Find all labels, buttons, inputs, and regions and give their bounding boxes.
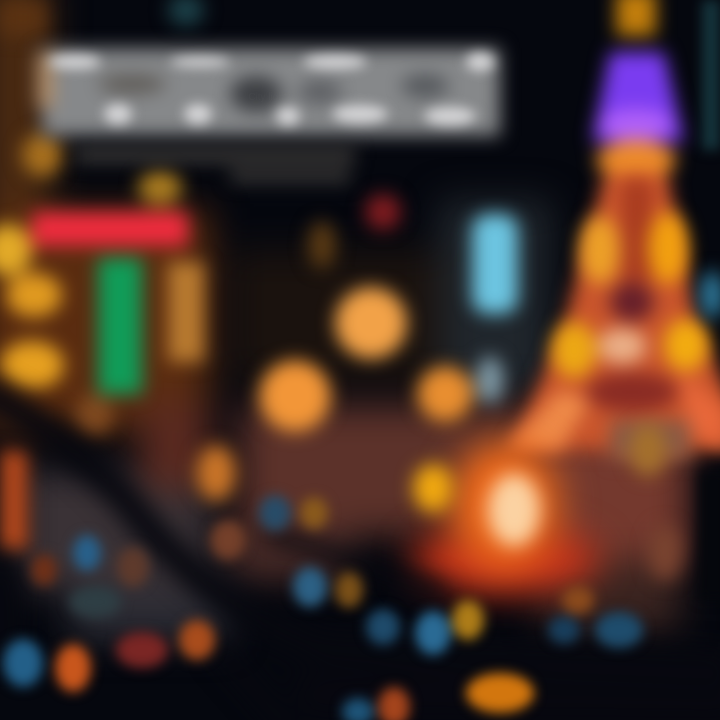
central fire xyxy=(410,440,600,594)
left buildings xyxy=(0,0,204,550)
dark curved roads xyxy=(0,395,720,720)
subtitle: faint blurred line xyxy=(75,148,355,182)
bottom lights xyxy=(3,495,643,720)
title: blurred headline block: City lights xyxy=(248,92,292,103)
title: blurred headline block xyxy=(36,48,500,136)
tower xyxy=(505,0,720,460)
centre lights xyxy=(196,194,720,581)
